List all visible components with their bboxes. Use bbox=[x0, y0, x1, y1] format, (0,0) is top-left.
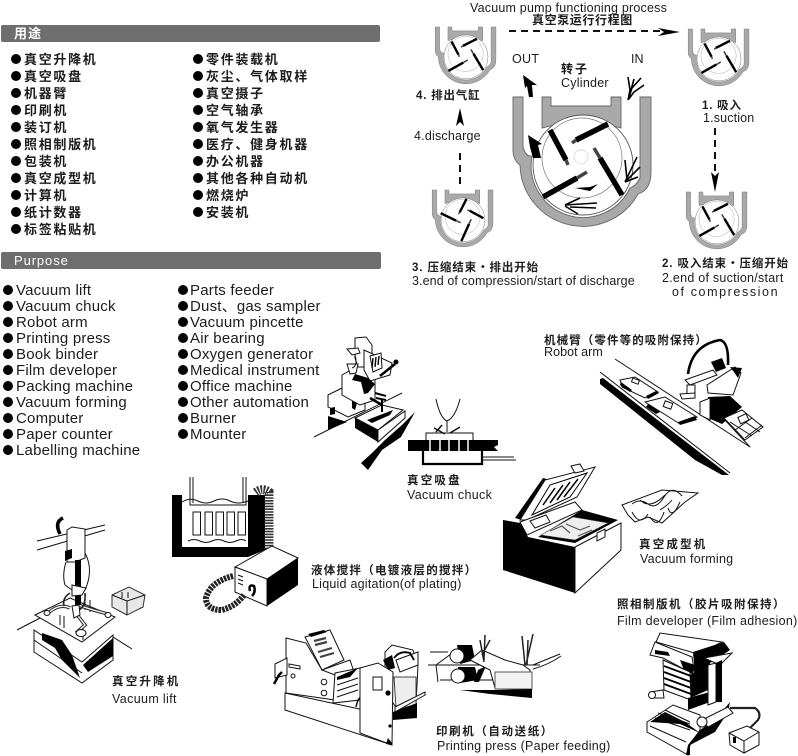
label: liquid agitation bbox=[311, 563, 477, 591]
label: film developer: Film developer (Film adhesion) bbox=[617, 614, 798, 628]
label: robot arm: 机械臂（零件等的吸附保持） bbox=[544, 333, 708, 347]
list: English purposes column 1: Vacuum lift bbox=[16, 282, 92, 299]
title: pump functioning process: 真空泵运行行程图 bbox=[532, 12, 633, 27]
title: pump functioning process bbox=[470, 1, 667, 27]
label: step 1: 1.suction bbox=[703, 111, 754, 125]
label: step 2 bbox=[662, 256, 789, 299]
heading bar: 用途 bbox=[1, 25, 380, 42]
list: Chinese purposes column 1: 真空吸盘 bbox=[24, 69, 83, 84]
icon: black slash bbox=[361, 412, 415, 470]
label: liquid agitation: 液体搅拌（电镀液层的搅拌） bbox=[311, 563, 477, 577]
label: vacuum chuck: 真空吸盘 bbox=[407, 473, 462, 487]
list: Chinese purposes column 1 bbox=[11, 52, 98, 237]
list: English purposes column 2: Oxygen generator bbox=[190, 346, 313, 363]
label: liquid agitation: Liquid agitation(of plating) bbox=[312, 577, 462, 591]
list: Chinese purposes column 1: 计算机 bbox=[24, 188, 68, 203]
illustration: control box and cable bbox=[206, 546, 298, 610]
label: step 3 bbox=[412, 260, 635, 288]
illustration: film developer bbox=[647, 633, 759, 755]
diagram: central pump: Cylinder bbox=[561, 76, 609, 90]
icon: small junction box bbox=[729, 726, 759, 753]
list: English purposes column 1: Labelling machine bbox=[16, 442, 140, 459]
list: Chinese purposes column 2: 真空摄子 bbox=[206, 86, 265, 101]
illustration: robot arm bbox=[600, 340, 763, 475]
label: step 1 bbox=[702, 99, 754, 125]
label: step 4: 4. 排出气缸 bbox=[416, 88, 480, 102]
list: English purposes column 1: Paper counter bbox=[16, 426, 113, 443]
list: Chinese purposes column 2 bbox=[193, 52, 309, 220]
list: English purposes column 2: Vacuum pincette bbox=[190, 314, 304, 331]
illustration: vacuum lift bbox=[17, 518, 145, 683]
label: vacuum forming bbox=[639, 537, 733, 566]
list: Chinese purposes column 1: 纸计数器 bbox=[24, 205, 83, 220]
label: step 3: 3. 压缩结束・排出开始 bbox=[412, 260, 539, 274]
list: English purposes column 1: Packing machine bbox=[16, 378, 133, 395]
label: vacuum chuck bbox=[407, 473, 493, 502]
list: Chinese purposes column 2: 零件装载机 bbox=[206, 52, 280, 67]
label: vacuum forming: Vacuum forming bbox=[640, 552, 733, 566]
list: English purposes column 2: Burner bbox=[190, 410, 236, 427]
list: Chinese purposes column 2: 灰尘、气体取样 bbox=[206, 69, 309, 84]
list: Chinese purposes column 1: 包装机 bbox=[24, 154, 68, 169]
title: pump functioning process: Vacuum pump functioning process bbox=[470, 1, 667, 15]
label: vacuum forming: 真空成型机 bbox=[639, 537, 708, 551]
list: Chinese purposes column 1: 装订机 bbox=[24, 120, 68, 135]
diagram: central pump bbox=[512, 52, 651, 226]
label: robot arm: Robot arm bbox=[544, 345, 603, 359]
list: Chinese purposes column 2: 其他各种自动机 bbox=[206, 171, 309, 186]
illustration: vacuum chuck bbox=[408, 399, 516, 464]
list: Chinese purposes column 2: 氧气发生器 bbox=[206, 120, 280, 135]
list: Chinese purposes column 2: 安装机 bbox=[206, 205, 250, 220]
list: English purposes column 2: Mounter bbox=[190, 426, 246, 443]
label: step 1: 1. 吸入 bbox=[702, 99, 742, 112]
list: Chinese purposes column 1: 真空成型机 bbox=[24, 171, 98, 186]
list: English purposes column 2: Parts feeder bbox=[190, 282, 274, 299]
label: vacuum chuck: Vacuum chuck bbox=[407, 488, 493, 502]
diagram: step 1 mini pump bbox=[688, 29, 749, 86]
icon: corrugated hose bbox=[255, 490, 269, 552]
arrow: right dashed bbox=[711, 128, 719, 192]
label: printing press: Printing press (Paper feeding) bbox=[437, 739, 611, 753]
illustration: liquid agitation tank bbox=[172, 477, 269, 557]
list: Chinese purposes column 2: 办公机器 bbox=[206, 154, 265, 169]
heading bar: 用途: 用途 bbox=[14, 26, 42, 41]
label: step 2: 2.end of suction/start bbox=[662, 271, 784, 285]
list: English purposes column 1: Computer bbox=[16, 410, 83, 427]
arrow: top dashed bbox=[509, 28, 680, 36]
list: Chinese purposes column 1: 机器臂 bbox=[24, 86, 68, 101]
list: English purposes column 2 bbox=[178, 282, 321, 443]
diagram: central pump: OUT bbox=[512, 52, 539, 66]
list: English purposes column 2: Dust、gas sampler bbox=[190, 298, 321, 315]
illustration: formed tray bbox=[622, 490, 698, 523]
list: English purposes column 1: Vacuum forming bbox=[16, 394, 127, 411]
icon: stacked box bbox=[112, 587, 145, 615]
diagram: step 2 mini pump bbox=[686, 192, 747, 249]
label: step 4 bbox=[414, 88, 481, 143]
label: printing press bbox=[436, 724, 611, 753]
list: Chinese purposes column 2: 空气轴承 bbox=[206, 103, 265, 118]
heading bar: Purpose: Purpose bbox=[14, 253, 69, 268]
label: printing press: 印刷机（自动送纸） bbox=[436, 724, 554, 738]
label: vacuum lift: 真空升降机 bbox=[112, 674, 180, 688]
label: film developer bbox=[617, 597, 798, 628]
arrow: left dashed bbox=[456, 108, 464, 184]
list: English purposes column 1: Vacuum chuck bbox=[16, 298, 116, 315]
arrow: out bbox=[523, 75, 542, 158]
illustration: paper feeding rollers bbox=[428, 634, 561, 698]
list: Chinese purposes column 1: 真空升降机 bbox=[24, 52, 98, 67]
list: English purposes column 1: Book binder bbox=[16, 346, 98, 363]
list: English purposes column 1 bbox=[3, 282, 140, 459]
list: English purposes column 2: Medical instrument bbox=[190, 362, 320, 379]
list: Chinese purposes column 1: 标签粘贴机 bbox=[24, 222, 98, 237]
diagram: central pump: 转子 bbox=[561, 61, 589, 76]
label: step 2: 2. 吸入结束・压缩开始 bbox=[662, 256, 789, 270]
label: vacuum lift bbox=[112, 674, 180, 706]
list: Chinese purposes column 1: 照相制版机 bbox=[24, 137, 98, 152]
label: robot arm bbox=[544, 333, 708, 359]
diagram: step 4 mini pump bbox=[435, 27, 496, 84]
list: English purposes column 1: Robot arm bbox=[16, 314, 88, 331]
list: English purposes column 1: Printing press bbox=[16, 330, 111, 347]
illustration: chuck machine bbox=[314, 337, 415, 470]
list: English purposes column 2: Other automation bbox=[190, 394, 309, 411]
label: step 2: of compression bbox=[672, 285, 779, 299]
heading bar: Purpose bbox=[1, 252, 381, 269]
list: Chinese purposes column 1: 印刷机 bbox=[24, 103, 68, 118]
list: English purposes column 2: Office machine bbox=[190, 378, 293, 395]
label: film developer: 照相制版机（胶片吸附保持） bbox=[617, 597, 786, 611]
label: step 4: 4.discharge bbox=[414, 129, 481, 143]
label: step 3: 3.end of compression/start of discharge bbox=[412, 274, 635, 288]
illustration: printing press bbox=[274, 630, 425, 745]
diagram: step 3 mini pump bbox=[432, 190, 493, 247]
list: Chinese purposes column 2: 医疗、健身机器 bbox=[206, 137, 309, 152]
list: Chinese purposes column 2: 燃烧炉 bbox=[206, 188, 250, 203]
list: English purposes column 1: Film developer bbox=[16, 362, 117, 379]
list: English purposes column 2: Air bearing bbox=[190, 330, 265, 347]
label: vacuum lift: Vacuum lift bbox=[112, 692, 177, 706]
illustration: vacuum forming machine bbox=[503, 464, 621, 593]
diagram: central pump: IN bbox=[631, 52, 644, 66]
arrow: in flows bbox=[565, 77, 644, 214]
